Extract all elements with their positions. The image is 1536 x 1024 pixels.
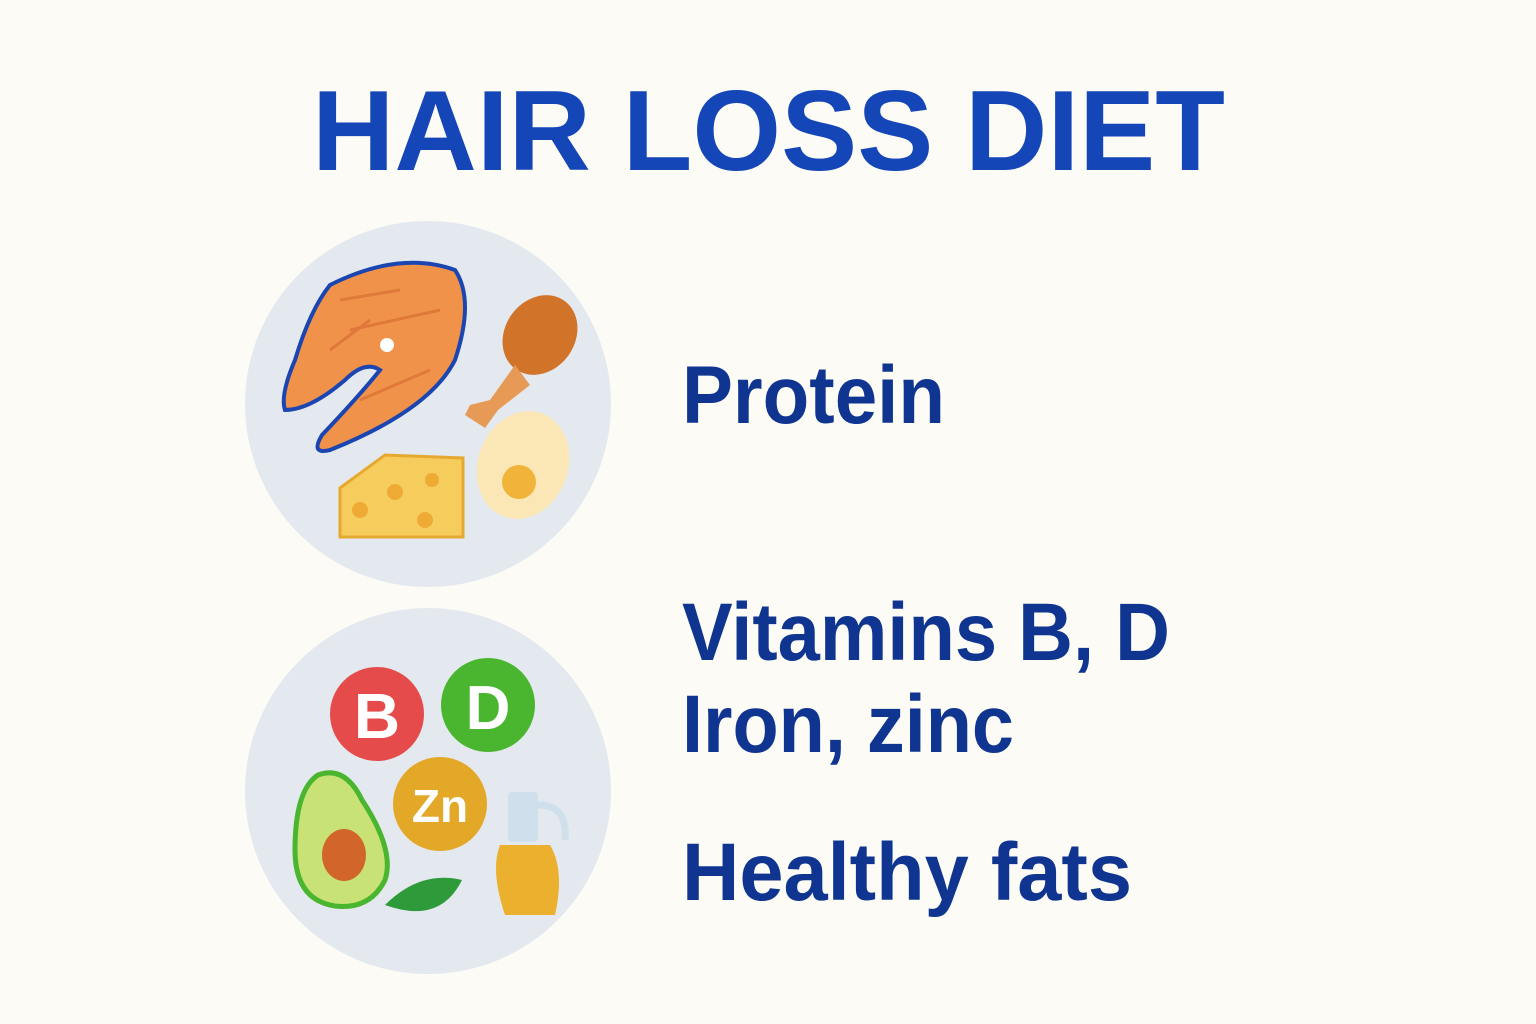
title: HAIR LOSS DIET <box>312 68 1225 195</box>
icon: vitamin B: B <box>354 680 400 752</box>
icon: egg <box>462 398 584 532</box>
icon: leaf <box>385 878 462 911</box>
icon: chicken drumstick <box>465 281 593 428</box>
icon: vitamin D: D <box>466 674 510 743</box>
icon: vitamin B <box>330 667 424 761</box>
panel: vitamins icon circle <box>245 608 611 974</box>
panel: protein icon circle <box>245 221 611 587</box>
text: iron zinc: Iron, zinc <box>682 679 1014 770</box>
text: protein: Protein <box>682 350 945 441</box>
icon: cheese <box>340 455 463 537</box>
icon: salmon steak <box>284 263 465 451</box>
text: healthy fats: Healthy fats <box>682 827 1132 918</box>
icon: zinc: Zn <box>412 780 468 832</box>
icon: zinc <box>393 757 487 851</box>
icon: vitamin D <box>441 658 535 752</box>
text: vitamins: Vitamins B, D <box>682 587 1170 678</box>
icon: oil bottle <box>496 792 565 915</box>
icon: avocado <box>295 773 387 906</box>
